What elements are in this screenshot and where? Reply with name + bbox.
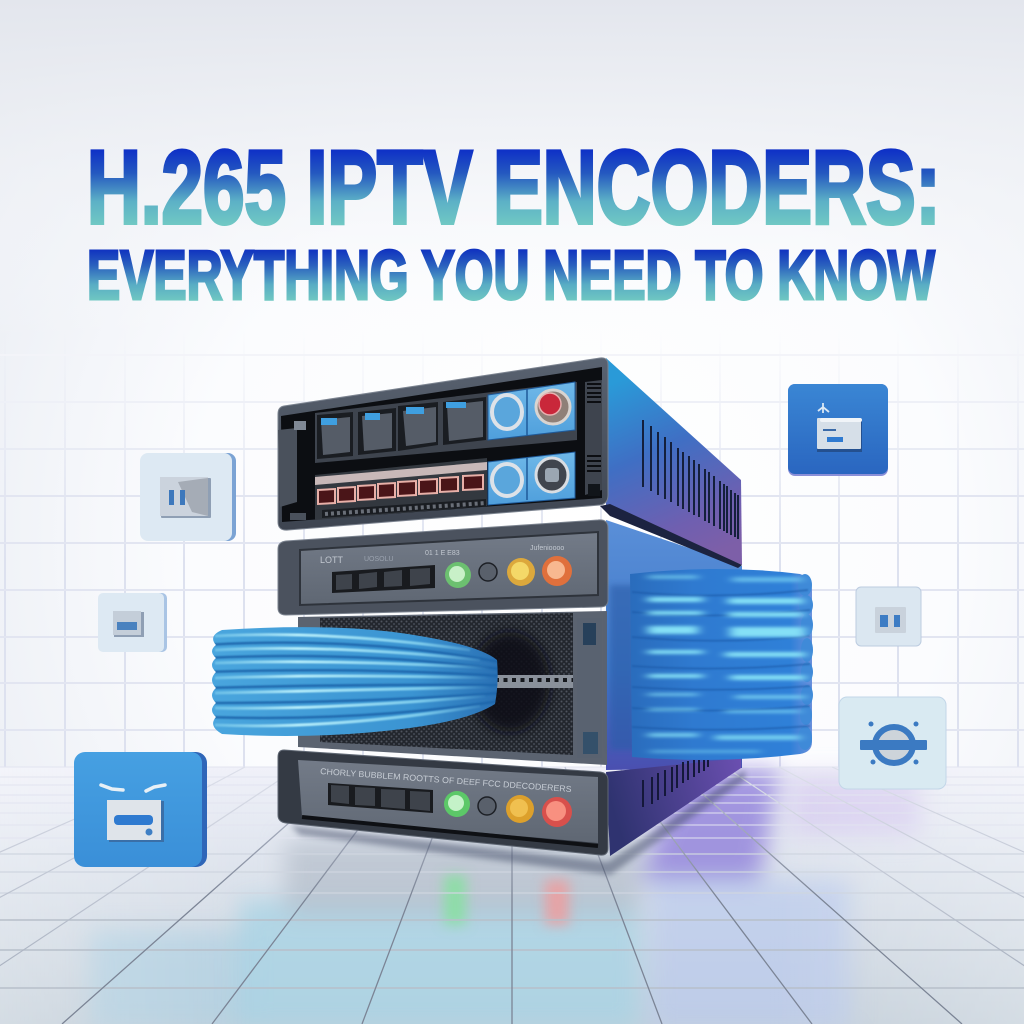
- floor tile lines: [0, 767, 1024, 1024]
- key row: [328, 783, 433, 813]
- right cable coil: [630, 569, 813, 760]
- lower shelf and network ports: [315, 458, 487, 520]
- label text: [320, 545, 564, 565]
- panel plate: [875, 607, 906, 633]
- upper blue button panel: [488, 382, 575, 440]
- LED reflections: [444, 875, 569, 925]
- left cable coil: [212, 627, 498, 736]
- shadow under stack: [290, 770, 745, 875]
- unit 4: bottom panel unit: [278, 750, 608, 855]
- white marks: [101, 785, 165, 791]
- label text: 01 1 E E83: [425, 550, 460, 557]
- mesh centre strip: [480, 675, 573, 688]
- label text: CHORLY BUBBLEM ROOTTS OF DEEF FCC DDECODERERS: [320, 766, 572, 794]
- drive bay 1: [317, 412, 353, 459]
- icon tile: socket, upper left: [140, 453, 236, 541]
- floor: [0, 767, 1024, 1024]
- floor reflections: [90, 770, 920, 1024]
- unit 3: mesh unit: [298, 611, 607, 765]
- status LEDs: [445, 556, 572, 588]
- label text: LOTT: [320, 555, 344, 565]
- wall grid: [0, 330, 1024, 770]
- ring and bar: [860, 722, 927, 764]
- side vents lower: [643, 760, 708, 807]
- icon tile: small panel, middle right: [856, 587, 921, 646]
- cable ring edge: [798, 574, 813, 750]
- window plate: [817, 418, 862, 452]
- drive bay 3: [398, 402, 438, 451]
- icon tile: blue device, lower left: [74, 752, 207, 867]
- server stack: [278, 358, 745, 875]
- drive bay 4: [443, 397, 486, 445]
- icon tile: ring symbol, lower right: [839, 697, 946, 789]
- title line 1: H.265 IPTV ENCODERS:: [87, 130, 940, 246]
- cable highlights: [648, 575, 805, 753]
- drive bay 2: [358, 408, 396, 455]
- right vent column: [585, 380, 602, 496]
- right column windows: [577, 618, 602, 758]
- unit 1: top rack unit: [278, 358, 608, 530]
- left bracket: [278, 428, 297, 507]
- status LEDs: [444, 791, 572, 827]
- unit 2: status panel unit: [278, 520, 608, 615]
- top shading: [0, 0, 1024, 340]
- title: [87, 130, 940, 314]
- floor side fade: [0, 767, 1024, 1024]
- star mark: [818, 403, 829, 413]
- key row: [332, 565, 435, 593]
- label text: Jufenioooo: [530, 545, 564, 552]
- server side panels: [600, 358, 742, 856]
- label text: UOSOLU: [364, 556, 394, 563]
- icon tile: small card, middle left: [98, 593, 167, 652]
- lower blue button panel: [488, 452, 575, 505]
- socket plate: [160, 477, 211, 518]
- upper shelf plate: [315, 382, 577, 463]
- title line 2: EVERYTHING YOU NEED TO KNOW: [87, 236, 935, 314]
- side vents upper: [643, 420, 738, 539]
- card plate: [113, 611, 144, 637]
- device plate: [107, 800, 164, 842]
- right cable shadow: [610, 585, 636, 750]
- icon tile: blue window, upper right: [788, 384, 888, 476]
